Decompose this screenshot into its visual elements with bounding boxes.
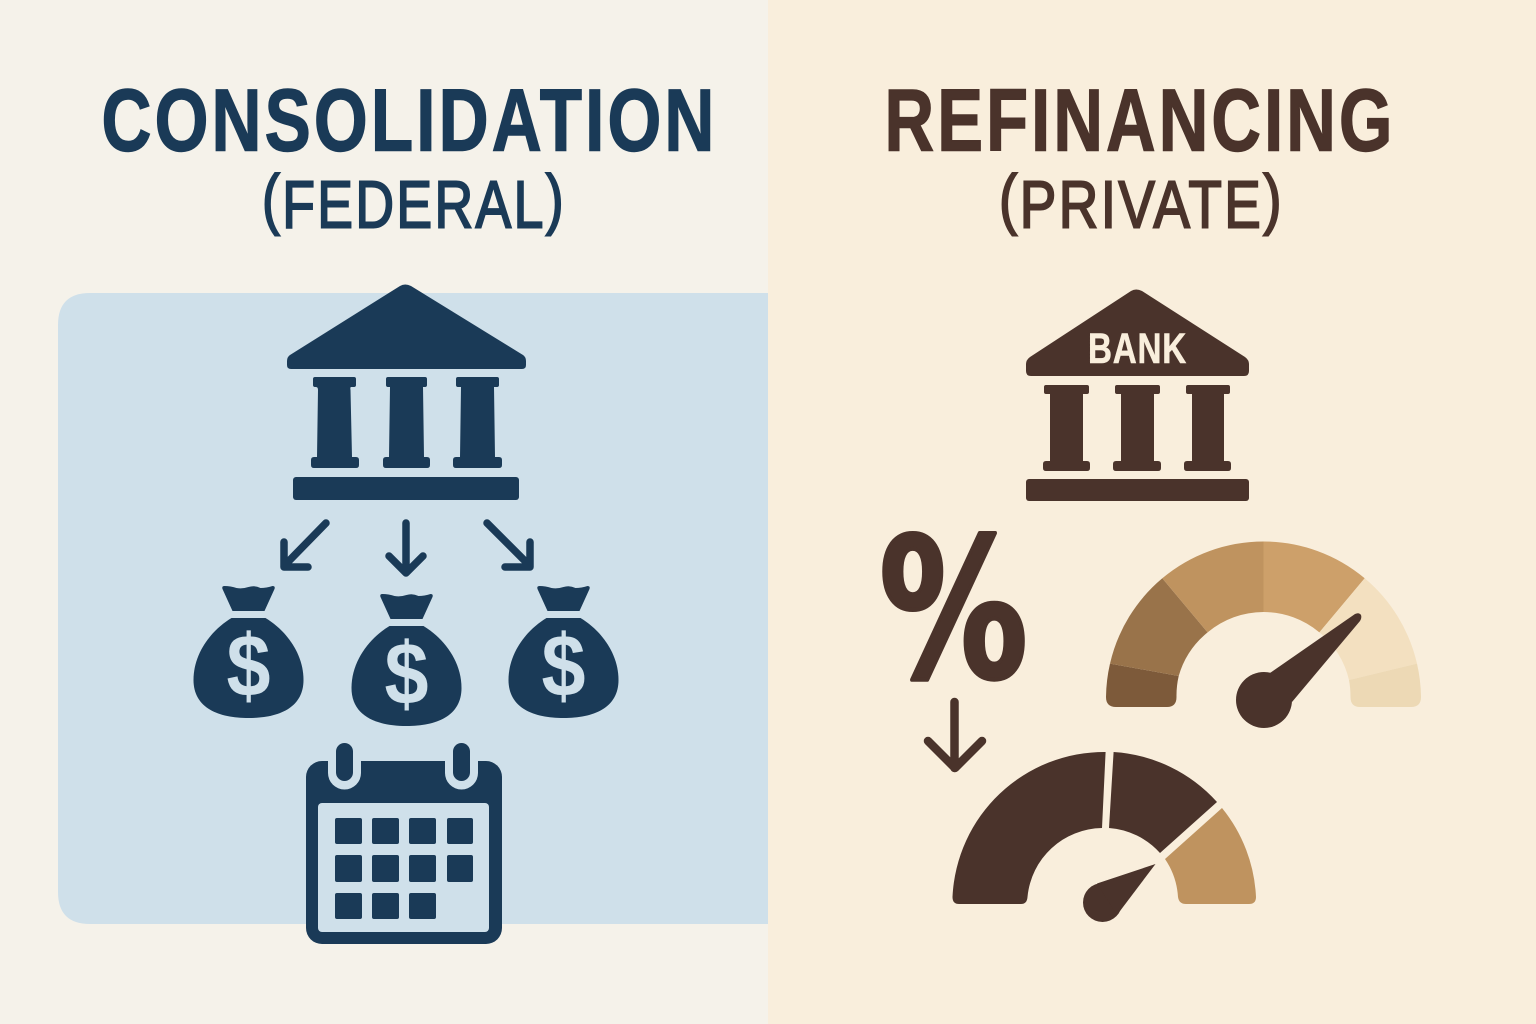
icon: money bag right: $ (542, 616, 586, 715)
panel: blue consolidation area (58, 293, 768, 924)
icon: money bag middle (352, 594, 462, 726)
heading: private: PRIVATE (1020, 168, 1263, 242)
panel: left background (0, 0, 768, 1024)
bank label: BANK (1088, 325, 1187, 373)
icon: money bag left: $ (226, 616, 270, 715)
icon: percent sign: % (879, 497, 1028, 723)
heading: refinancing: REFINANCING (884, 70, 1396, 170)
needle: low rate (1083, 864, 1156, 922)
heading: federal: FEDERAL (282, 168, 546, 242)
heading: federal: ( (262, 162, 282, 236)
icon: calendar (306, 743, 502, 944)
icon: federal building (287, 284, 526, 500)
icon: private bank (1026, 290, 1249, 501)
icon: down arrow (928, 702, 982, 768)
chart: high rate gauge (1106, 541, 1421, 728)
icon: money bag middle: $ (384, 624, 428, 723)
needle: high rate (1236, 613, 1361, 728)
icon: arrows to loans (284, 523, 530, 573)
heading: federal: ) (546, 162, 566, 236)
chart: low rate gauge (952, 752, 1256, 922)
heading: consolidation: CONSOLIDATION (102, 70, 718, 170)
icon: money bag left (194, 586, 304, 718)
heading: private: ) (1263, 162, 1284, 236)
panel: right background (768, 0, 1536, 1024)
heading: private: ( (999, 162, 1020, 236)
icon: money bag right (508, 586, 618, 718)
